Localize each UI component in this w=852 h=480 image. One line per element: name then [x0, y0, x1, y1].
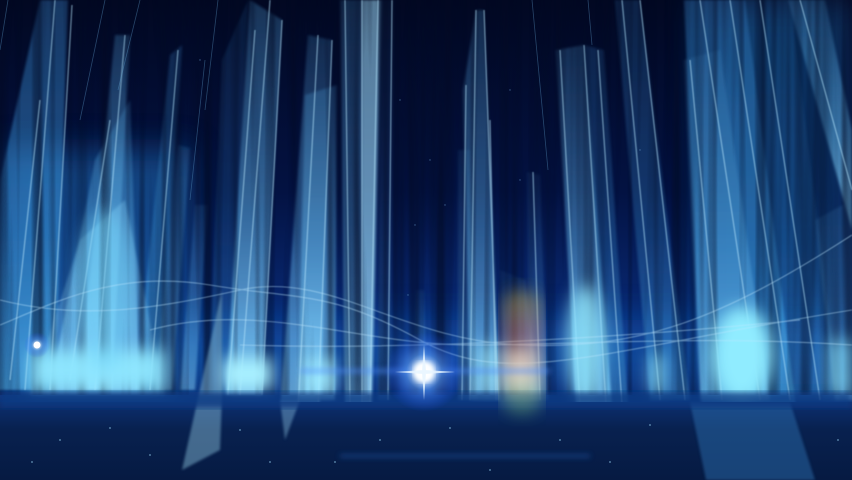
lens flare: rainbow streak [502, 290, 542, 414]
lens flare: horizontal blue streak [300, 369, 590, 457]
lens flare: small left light [24, 332, 50, 358]
floor: dark ground band [0, 402, 852, 480]
tower edges: faint sky streaks [0, 0, 592, 200]
sky: small stars [199, 59, 641, 296]
towers: left cluster [0, 0, 208, 395]
lens flare: central light [384, 332, 464, 412]
towers: right cluster [684, 0, 852, 480]
light waves: horizontal ribbons [0, 235, 852, 363]
towers: centre-right cluster [556, 0, 690, 405]
tower reflections on the floor [182, 290, 815, 480]
floor: skyline silhouette edge [0, 392, 852, 408]
towers: centre-left cluster [208, 0, 394, 410]
glow: bright tower bases [30, 210, 852, 405]
towers: centre cluster [414, 10, 548, 400]
floor: scattered light dots [31, 424, 839, 471]
